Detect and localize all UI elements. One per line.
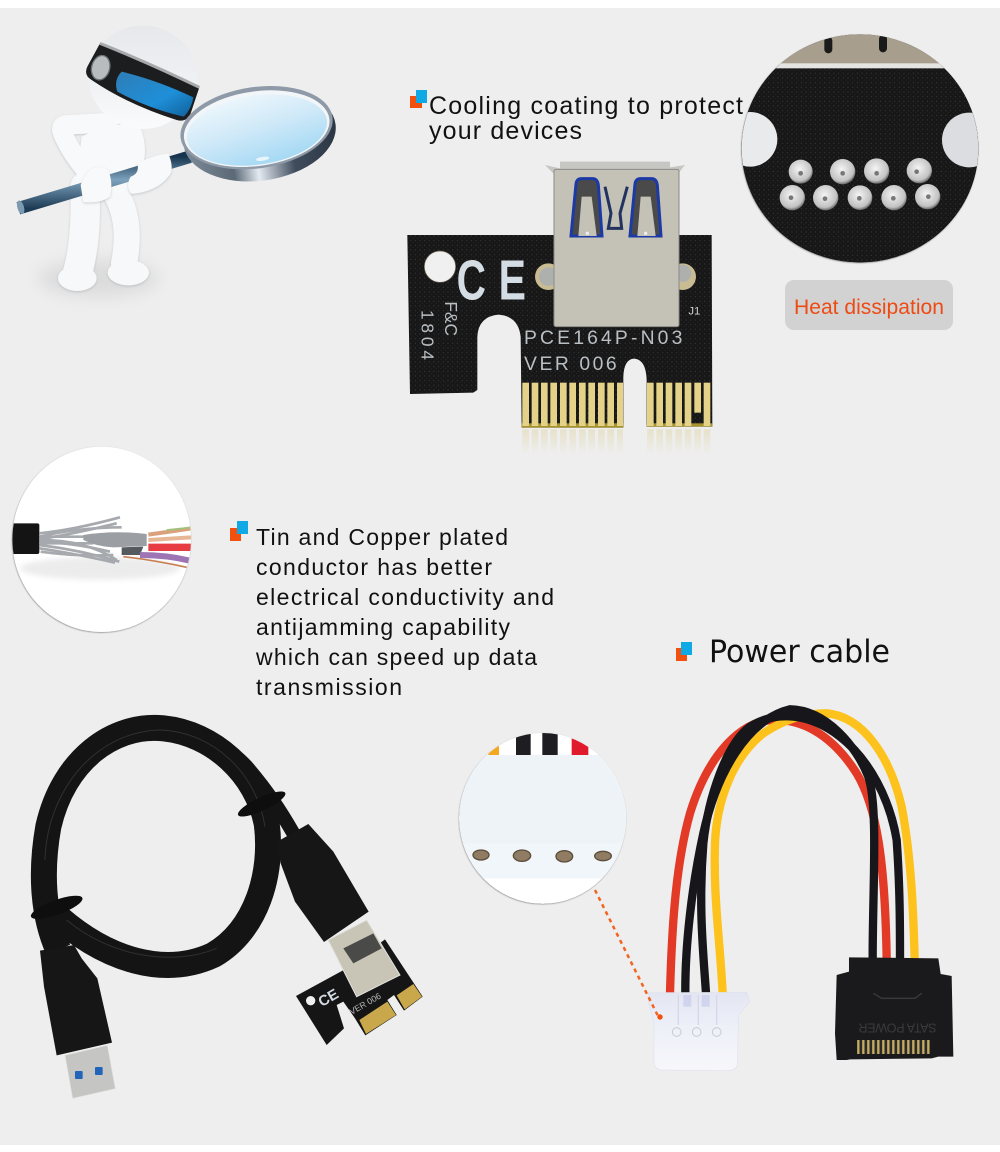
board silkscreen text: F&C (441, 301, 461, 336)
connector pins (473, 850, 611, 862)
figure hand gripping handle (81, 167, 111, 202)
photo: SATA to Molex power cable (648, 709, 953, 1071)
text: conductor description: antijamming capability (256, 614, 510, 640)
bullet icon: conductor (230, 521, 248, 541)
row of solder pads (780, 158, 940, 210)
small USB socket (328, 920, 400, 997)
Molex connector (648, 992, 750, 1071)
cable jacket (10, 523, 39, 554)
gold contacts left (522, 383, 623, 426)
figure head (89, 26, 197, 129)
inset circle: heat dissipation solder joints (740, 34, 979, 264)
wire ends (488, 733, 588, 755)
coloured wires (670, 709, 915, 993)
magnifier handle (16, 157, 190, 215)
SATA moulded label: SATA POWER (858, 1020, 937, 1034)
connector body (460, 755, 626, 844)
USB plug A body (40, 945, 112, 1055)
text: conductor description: which can speed up data (255, 644, 537, 670)
text: conductor description: transmission (256, 674, 402, 700)
small riser board (296, 920, 423, 1045)
SATA connector (835, 957, 953, 1060)
cable tie rings (28, 787, 288, 924)
coloured conductors (123, 527, 192, 567)
figure feet (58, 260, 149, 291)
gold contact reflection (520, 428, 713, 455)
text: cooling coating (429, 92, 743, 145)
bullet icon: power cable (676, 642, 692, 661)
inset circle: stripped cable (10, 447, 192, 632)
board silkscreen text: 1804 (418, 310, 438, 360)
small board text: VER 006 (348, 991, 383, 1017)
board silkscreen text (418, 301, 700, 375)
CE mark (457, 249, 526, 312)
USB plug A metal (65, 1045, 115, 1098)
figure second hand (128, 153, 172, 194)
text: conductor description: Tin and Copper plated (256, 524, 508, 550)
CE mark: C (457, 249, 486, 312)
figure body (58, 123, 149, 291)
inset circle: Molex connector close-up (458, 732, 626, 906)
solder lugs (535, 263, 696, 290)
board silkscreen text: VER 006 (524, 354, 617, 375)
text: cooling coating: your devices (429, 117, 582, 145)
illustration: figure with magnifying glass (16, 26, 342, 297)
text: conductor description: conductor has better (256, 554, 492, 580)
shielding braid (39, 517, 122, 563)
silver solder blobs (742, 112, 978, 168)
photo: PCIe riser board (407, 162, 713, 455)
board silkscreen text: J1 (688, 305, 700, 317)
helmet band with visor (86, 43, 199, 121)
callout: dotted leader line (595, 890, 663, 1020)
board silkscreen text: PCE164P-N03 (524, 328, 682, 349)
USB plug B body (277, 824, 369, 942)
label: heat dissipation (785, 280, 953, 330)
small CE mark: CE (316, 986, 342, 1011)
USB socket (545, 162, 685, 327)
mounting hole (424, 251, 456, 282)
figure torso (75, 125, 145, 193)
board outline (407, 235, 712, 428)
CE mark: E (499, 249, 526, 312)
text: conductor description: electrical conductivity and (256, 584, 554, 610)
gold base strip (522, 423, 712, 428)
coiled black cable (42, 728, 293, 965)
gold contacts right (647, 383, 710, 426)
magnifying glass lens (175, 76, 342, 191)
heading: power cable: Power cable (709, 634, 890, 670)
text: cooling coating: Cooling coating to protect (429, 92, 743, 120)
small gold contacts (359, 1002, 396, 1034)
label: heat dissipation: Heat dissipation (794, 296, 944, 319)
figure arm (62, 123, 108, 177)
figure legs (77, 187, 127, 273)
photo: USB 3.0 extension cable with riser (28, 728, 423, 1098)
bullet icon: cooling coating (410, 90, 427, 108)
SATA gold pins (857, 1040, 930, 1054)
text: conductor description (255, 524, 554, 700)
